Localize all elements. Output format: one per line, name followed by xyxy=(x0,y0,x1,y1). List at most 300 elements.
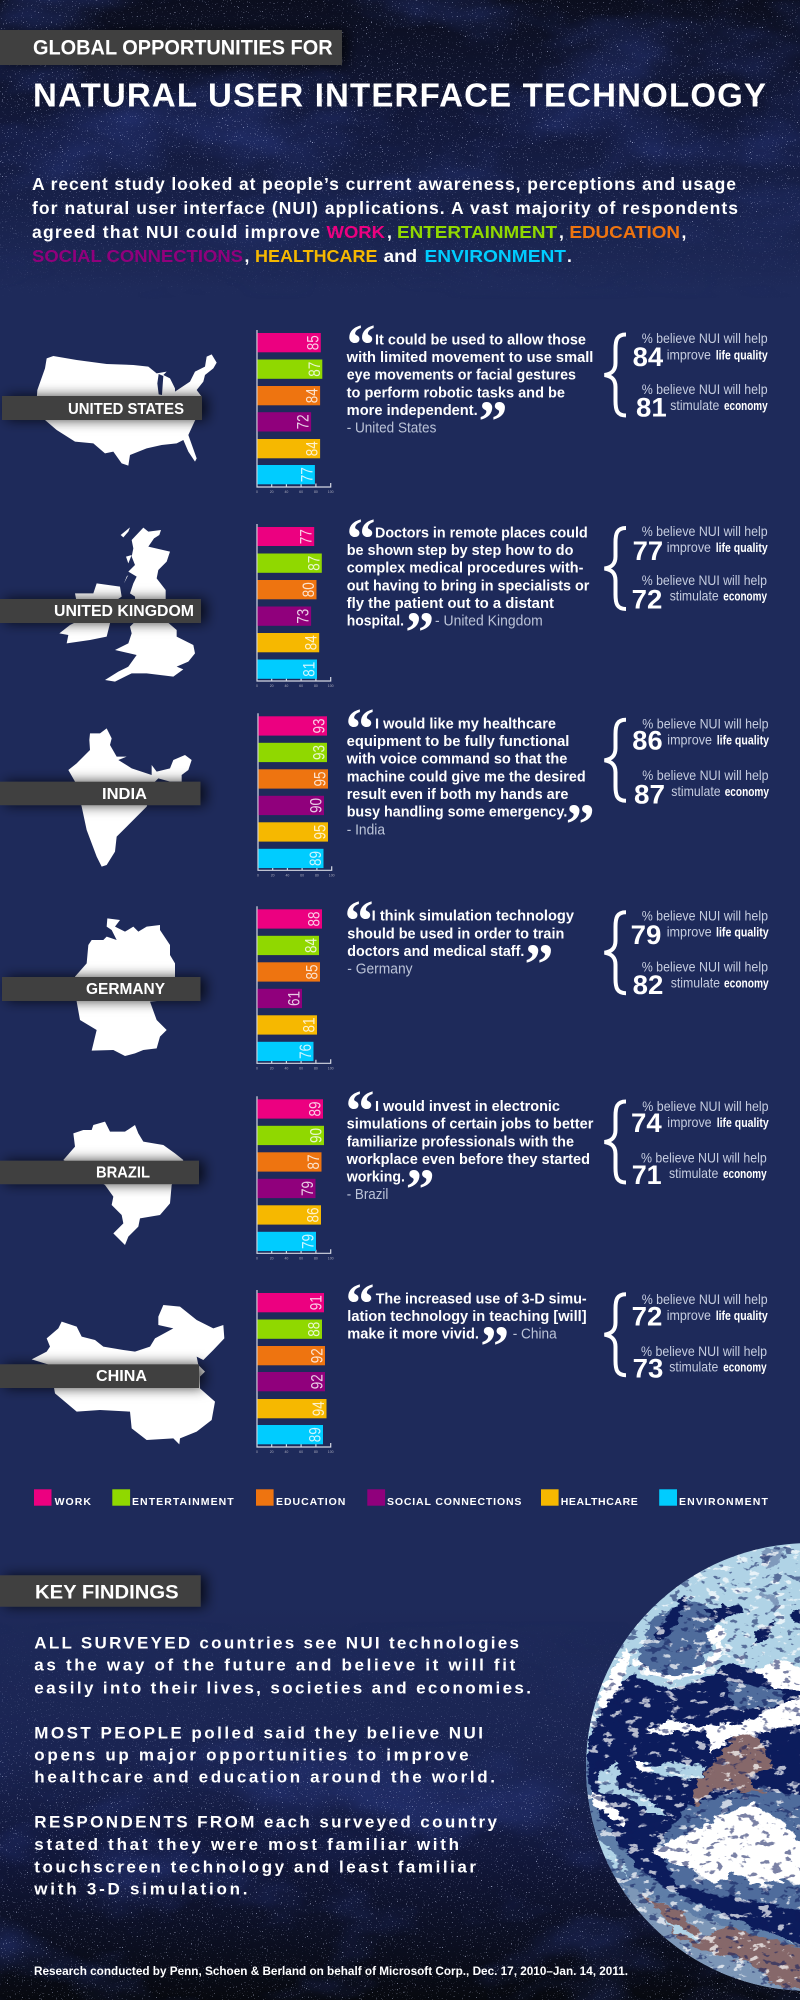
panel: China xyxy=(0,1271,768,1454)
bar: education 87 xyxy=(258,1152,323,1172)
key findings heading: KEY FINDINGS xyxy=(35,1581,179,1603)
axis labels: 60 xyxy=(299,1450,303,1454)
bar: education 92 xyxy=(258,1346,326,1365)
bar: work 88: 88 xyxy=(304,911,324,926)
axis labels: 40 xyxy=(284,1450,288,1454)
label banner: United Kingdom xyxy=(0,599,201,623)
axis labels: 0 xyxy=(256,684,258,688)
quote: United Kingdom: hospital. xyxy=(347,614,404,630)
earth globe xyxy=(586,1543,800,1991)
quote: Brazil: - Brazil xyxy=(347,1186,388,1203)
axis labels xyxy=(256,1066,334,1070)
economy stat xyxy=(632,1150,767,1190)
stats: Brazil xyxy=(604,1098,769,1190)
key findings banner xyxy=(0,1575,201,1607)
bar: work 91: 91 xyxy=(306,1295,326,1310)
quote: United States: with limited movement to use small xyxy=(346,350,593,366)
bar: entertainment 87: 87 xyxy=(304,556,323,571)
panel: Brazil xyxy=(0,1078,769,1260)
quote: India: with voice command so that the xyxy=(346,752,567,768)
quote: Brazil: ” xyxy=(406,1157,435,1222)
bar: healthcare 81 xyxy=(258,1015,318,1035)
life quality stat: improve xyxy=(667,346,711,362)
finding: most people: opens up major opportunities to improve xyxy=(34,1746,469,1765)
life quality stat: improve xyxy=(667,732,712,748)
label banner: India: INDIA xyxy=(102,786,147,803)
panel: United Kingdom xyxy=(0,506,768,688)
stats: United States xyxy=(604,330,768,423)
bar: environment 76: 76 xyxy=(296,1044,315,1059)
brace xyxy=(604,334,626,416)
bar: healthcare 84 xyxy=(258,439,322,458)
bar chart: Germany xyxy=(256,906,334,1070)
label banner: India xyxy=(0,782,200,805)
quote: China: make it more vivid. xyxy=(347,1327,479,1343)
axis labels: 100 xyxy=(328,684,334,688)
bar: social connections 61: 61 xyxy=(284,991,304,1006)
bar: education 80: 80 xyxy=(299,582,318,597)
axis labels: 40 xyxy=(285,873,289,877)
label banner: United Kingdom: UNITED KINGDOM xyxy=(54,603,194,620)
life quality stat: life quality xyxy=(716,1308,768,1323)
quote: Germany: doctors and medical staff. xyxy=(347,944,524,960)
intro paragraph: EDUCATION xyxy=(569,222,680,242)
legend: entertainment: ENTERTAINMENT xyxy=(132,1496,234,1508)
map: United States xyxy=(37,354,217,466)
bar: social connections 79 xyxy=(258,1179,317,1198)
quote: Brazil: working. xyxy=(346,1170,405,1186)
economy stat: economy xyxy=(724,976,769,991)
label banner: Germany xyxy=(2,977,200,1001)
intro paragraph: ENTERTAINMENT xyxy=(397,222,557,242)
axis labels xyxy=(256,684,334,688)
legend: work: WORK xyxy=(55,1496,91,1508)
bar: environment 89 xyxy=(258,1425,324,1444)
economy stat xyxy=(633,1343,767,1384)
bar: education 95 xyxy=(258,769,330,789)
quote: Brazil: workplace even before they started xyxy=(346,1152,590,1168)
axis labels: 0 xyxy=(256,1450,258,1454)
axis labels: 100 xyxy=(328,490,334,494)
economy stat: % believe NUI will help xyxy=(641,1343,767,1359)
life quality stat: improve xyxy=(667,924,712,940)
quote: Germany: I think simulation technology xyxy=(372,909,574,925)
bar: social connections 79: 79 xyxy=(298,1181,317,1196)
quote: United States xyxy=(346,312,593,454)
life quality stat: % believe NUI will help xyxy=(642,1291,768,1307)
axis labels xyxy=(256,1256,334,1260)
economy stat: economy xyxy=(724,398,768,413)
bar: entertainment 90 xyxy=(258,1126,326,1145)
title banner xyxy=(0,30,342,65)
quote: United Kingdom: Doctors in remote places could xyxy=(375,525,588,541)
quote: Brazil: “ xyxy=(346,1078,374,1143)
bar: entertainment 87 xyxy=(258,554,323,573)
map: India xyxy=(68,728,192,867)
bar: entertainment 88 xyxy=(258,1320,324,1339)
quote: China: The increased use of 3-D simu- xyxy=(376,1291,587,1307)
bar: social connections 72 xyxy=(258,412,313,432)
bar: environment 89: 89 xyxy=(306,1427,324,1442)
legend: education: EDUCATION xyxy=(276,1496,345,1508)
main title: NATURAL USER INTERFACE TECHNOLOGY xyxy=(33,77,766,114)
bar: environment 89 xyxy=(258,849,325,868)
quote: United States: It could be used to allow those xyxy=(375,332,586,348)
quote: United States: to perform robotic tasks and be xyxy=(347,385,565,401)
bar: work 93 xyxy=(258,716,328,736)
bar: education 95: 95 xyxy=(310,771,330,786)
label banner: China: CHINA xyxy=(96,1368,147,1385)
economy stat: % believe NUI will help xyxy=(641,1150,767,1166)
life quality stat: 77 xyxy=(633,536,663,566)
intro paragraph: for natural user interface (NUI) applications. A vast majority of respondents xyxy=(32,198,738,218)
bar: environment 81: 81 xyxy=(300,662,318,677)
life quality stat: life quality xyxy=(716,347,768,362)
quote: Brazil: I would invest in electronic xyxy=(375,1099,560,1115)
quote: United States: “ xyxy=(346,312,376,377)
finding: all surveyed: ALL SURVEYED countries see NUI technologies xyxy=(34,1633,519,1652)
map: Brazil xyxy=(63,1122,183,1245)
bar: social connections 61 xyxy=(258,989,304,1008)
quote: United States: eye movements or facial gestures xyxy=(347,368,576,384)
key findings section xyxy=(0,1575,531,1898)
economy stat: economy xyxy=(725,784,770,799)
bar: environment 76 xyxy=(258,1042,315,1061)
bar: education 80 xyxy=(258,580,318,599)
bar: education 85 xyxy=(258,962,322,982)
finding: respondents: with 3-D simulation. xyxy=(33,1879,248,1898)
life quality stat: life quality xyxy=(717,1115,769,1130)
axis labels xyxy=(256,490,334,494)
life quality stat: improve xyxy=(667,1114,712,1130)
bar: social connections 73: 73 xyxy=(294,609,313,624)
axis labels: 20 xyxy=(271,873,275,877)
axis labels: 0 xyxy=(256,490,258,494)
life quality stat: 74 xyxy=(631,1108,662,1138)
bar: healthcare 94 xyxy=(258,1399,328,1418)
quote: India xyxy=(346,696,595,857)
quote: United States: - United States xyxy=(347,420,436,437)
bar chart: China xyxy=(256,1290,334,1454)
legend: social connections xyxy=(367,1489,521,1508)
axis labels: 60 xyxy=(299,1256,303,1260)
bar: education 92: 92 xyxy=(308,1348,326,1363)
legend: healthcare: HEALTHCARE xyxy=(561,1496,638,1508)
bar: work 77 xyxy=(258,527,316,546)
intro paragraph xyxy=(32,174,738,266)
economy stat: 72 xyxy=(632,584,662,614)
map: China xyxy=(32,1305,224,1444)
economy stat: economy xyxy=(723,1166,767,1181)
label banner: China xyxy=(0,1364,199,1388)
life quality stat: life quality xyxy=(717,733,770,748)
life quality stat: 72 xyxy=(632,1302,662,1332)
axis labels: 100 xyxy=(329,873,335,877)
intro paragraph: , xyxy=(387,222,392,242)
axis xyxy=(257,524,331,681)
intro paragraph: , xyxy=(682,222,686,242)
axis labels: 40 xyxy=(284,1066,288,1070)
finding: all surveyed xyxy=(34,1633,531,1697)
intro paragraph: , xyxy=(244,246,249,266)
economy stat: 82 xyxy=(633,970,663,1000)
axis xyxy=(257,1290,331,1447)
axis labels: 40 xyxy=(284,1256,288,1260)
bar: entertainment 93 xyxy=(258,743,328,762)
axis labels: 0 xyxy=(256,1256,258,1260)
bar: entertainment 87 xyxy=(258,360,324,379)
stats: Germany xyxy=(604,908,769,1000)
legend: social connections: SOCIAL CONNECTIONS xyxy=(387,1496,521,1508)
economy stat: % believe NUI will help xyxy=(642,572,767,588)
intro paragraph: WORK xyxy=(326,222,385,242)
axis labels: 20 xyxy=(270,1066,274,1070)
axis xyxy=(257,330,331,487)
quote: China xyxy=(346,1271,587,1379)
legend: work xyxy=(34,1489,91,1508)
quote: United States: ” xyxy=(478,389,508,454)
label banner: United States xyxy=(2,396,202,420)
bar: work 77: 77 xyxy=(297,529,316,544)
panel: India xyxy=(0,696,770,877)
quote: China: “ xyxy=(346,1271,374,1336)
axis labels: 80 xyxy=(314,684,318,688)
quote: United Kingdom: “ xyxy=(346,506,376,571)
bar: social connections 90: 90 xyxy=(306,798,326,813)
legend xyxy=(34,1489,768,1508)
life quality stat: % believe NUI will help xyxy=(642,330,768,346)
quote: United Kingdom: out having to bring in specialists or xyxy=(347,578,590,594)
quote: China: ” xyxy=(480,1314,509,1379)
quote: United Kingdom: fly the patient out to a distant xyxy=(347,596,554,612)
bar: work 89 xyxy=(258,1099,324,1119)
axis labels: 0 xyxy=(256,1066,258,1070)
legend: education xyxy=(256,1489,345,1508)
life quality stat: % believe NUI will help xyxy=(642,716,769,732)
axis labels: 40 xyxy=(284,490,288,494)
label banner: United States: UNITED STATES xyxy=(68,401,184,418)
label banner: Germany: GERMANY xyxy=(86,981,165,998)
bar: work 89: 89 xyxy=(306,1102,324,1117)
axis labels: 80 xyxy=(314,1066,318,1070)
quote: United States: more independent. xyxy=(347,403,478,419)
bar: healthcare 84: 84 xyxy=(303,441,322,456)
bar: healthcare 81: 81 xyxy=(300,1017,318,1032)
quote: China: - China xyxy=(513,1326,557,1343)
axis labels: 100 xyxy=(328,1450,334,1454)
life quality stat: 84 xyxy=(633,342,663,372)
bar: work 85: 85 xyxy=(303,335,322,350)
quote: United Kingdom: ” xyxy=(405,600,434,665)
economy stat: stimulate xyxy=(671,975,720,991)
quote: India: busy handling some emergency. xyxy=(347,805,567,821)
quote: India: I would like my healthcare xyxy=(375,716,556,732)
quote: India: equipment to be fully functional xyxy=(347,734,569,750)
bar chart: India xyxy=(257,713,335,877)
bar chart: United Kingdom xyxy=(256,524,334,688)
economy stat: % believe NUI will help xyxy=(642,767,769,783)
quote: Brazil xyxy=(346,1078,594,1222)
map: Germany xyxy=(75,918,175,1056)
brace xyxy=(604,912,626,993)
bar: healthcare 84 xyxy=(258,633,321,652)
bar: healthcare 95 xyxy=(258,822,330,842)
economy stat xyxy=(633,959,769,1000)
bar chart: United States xyxy=(256,330,334,494)
life quality stat: % believe NUI will help xyxy=(642,1098,769,1114)
quote: United Kingdom xyxy=(346,506,590,665)
bar: healthcare 86: 86 xyxy=(304,1208,322,1223)
bar: work 91 xyxy=(258,1293,326,1312)
axis labels: 100 xyxy=(328,1066,334,1070)
economy stat: stimulate xyxy=(670,397,719,413)
life quality stat xyxy=(633,523,768,566)
bar: education 84 xyxy=(258,386,322,405)
economy stat xyxy=(636,381,768,423)
axis labels: 80 xyxy=(314,490,318,494)
axis labels: 100 xyxy=(328,1256,334,1260)
life quality stat xyxy=(631,1098,769,1138)
quote: Brazil: simulations of certain jobs to better xyxy=(347,1117,594,1133)
bar: social connections 92: 92 xyxy=(308,1374,326,1389)
economy stat: economy xyxy=(723,589,768,604)
stats: China xyxy=(604,1291,768,1384)
brace xyxy=(604,528,626,609)
quote: Germany: ” xyxy=(524,932,554,997)
brace xyxy=(604,1294,626,1375)
axis labels: 0 xyxy=(257,873,259,877)
economy stat xyxy=(634,767,770,809)
map: United Kingdom and Ireland xyxy=(59,527,195,682)
quote: United Kingdom: be shown step by step how to do xyxy=(347,543,574,559)
bar: entertainment 90: 90 xyxy=(306,1128,326,1143)
life quality stat: life quality xyxy=(716,540,768,555)
brace xyxy=(604,720,626,801)
finding: most people: healthcare and education around the world. xyxy=(34,1768,495,1787)
bar: education 85: 85 xyxy=(302,964,322,979)
economy stat: stimulate xyxy=(670,588,719,604)
quote: Germany: should be used in order to train xyxy=(347,926,564,942)
quote: Germany: - Germany xyxy=(347,961,413,978)
axis labels: 20 xyxy=(270,490,274,494)
intro paragraph: ENVIRONMENT xyxy=(424,246,566,266)
life quality stat: % believe NUI will help xyxy=(642,908,768,924)
quote: India: - India xyxy=(347,822,386,839)
life quality stat: 79 xyxy=(631,920,661,950)
kicker heading: GLOBAL OPPORTUNITIES FOR xyxy=(33,36,333,59)
life quality stat: life quality xyxy=(716,925,769,940)
stats: United Kingdom xyxy=(604,523,768,614)
axis labels: 60 xyxy=(299,1066,303,1070)
bar: work 85 xyxy=(258,333,322,352)
axis labels: 60 xyxy=(299,684,303,688)
bar: entertainment 84 xyxy=(258,936,320,955)
economy stat: % believe NUI will help xyxy=(642,959,768,975)
life quality stat: improve xyxy=(667,539,711,555)
quote: India: ” xyxy=(566,792,595,857)
axis labels xyxy=(257,873,335,877)
axis labels: 20 xyxy=(270,1450,274,1454)
economy stat: stimulate xyxy=(671,783,721,799)
economy stat: stimulate xyxy=(669,1165,718,1181)
economy stat: 87 xyxy=(634,779,665,809)
axis labels: 60 xyxy=(300,873,304,877)
brace xyxy=(604,1102,626,1182)
quote: Germany: “ xyxy=(344,888,374,953)
footer source note: Research conducted by Penn, Schoen & Berland on behalf of Microsoft Corp., Dec. 17, 2010–Jan. 14, 2011. xyxy=(34,1964,628,1978)
intro paragraph: . xyxy=(567,246,572,266)
bar: social connections 72: 72 xyxy=(294,414,313,429)
life quality stat xyxy=(631,908,769,950)
quote: Germany xyxy=(344,888,574,997)
life quality stat: % believe NUI will help xyxy=(642,523,768,539)
axis xyxy=(258,713,332,870)
intro paragraph: agreed that NUI could improve xyxy=(32,222,320,242)
axis labels xyxy=(256,1450,334,1454)
legend: healthcare xyxy=(541,1489,638,1508)
panel: United States xyxy=(2,312,768,494)
economy stat: economy xyxy=(723,1360,767,1375)
quote: India: result even if both my hands are xyxy=(347,787,568,803)
quote: China: lation technology in teaching [will] xyxy=(347,1309,587,1325)
quote: United Kingdom: - United Kingdom xyxy=(435,613,543,630)
quote: Brazil: familiarize professionals with the xyxy=(347,1134,574,1150)
quote: India: machine could give me the desired xyxy=(347,769,586,785)
bar: social connections 73 xyxy=(258,606,313,626)
title block xyxy=(0,30,766,114)
finding: all surveyed: easily into their lives, societies and economies. xyxy=(34,1678,531,1697)
bar: entertainment 88: 88 xyxy=(304,1322,324,1337)
intro paragraph: A recent study looked at people’s current awareness, perceptions and usage xyxy=(32,174,736,194)
legend: entertainment xyxy=(112,1489,234,1508)
label banner: Brazil: BRAZIL xyxy=(96,1164,150,1182)
bar: healthcare 84: 84 xyxy=(302,635,321,650)
finding: respondents: touchscreen technology and least familiar xyxy=(34,1857,476,1876)
bar: education 84: 84 xyxy=(303,388,322,403)
life quality stat: improve xyxy=(667,1307,711,1323)
axis xyxy=(257,1096,331,1253)
economy stat: 71 xyxy=(632,1160,662,1190)
economy stat: 81 xyxy=(636,393,667,423)
quote: India: “ xyxy=(346,696,374,761)
bar: environment 77: 77 xyxy=(297,467,316,482)
bar: healthcare 86 xyxy=(258,1205,322,1225)
bar: entertainment 84: 84 xyxy=(302,938,320,953)
bar: environment 81 xyxy=(258,660,318,679)
label banner: Brazil xyxy=(0,1161,199,1184)
economy stat: stimulate xyxy=(669,1359,718,1375)
axis labels: 20 xyxy=(270,684,274,688)
life quality stat xyxy=(632,1291,768,1332)
bar: entertainment 93: 93 xyxy=(310,745,328,760)
intro paragraph: HEALTHCARE xyxy=(255,246,378,266)
axis labels: 80 xyxy=(314,1256,318,1260)
intro paragraph: SOCIAL CONNECTIONS xyxy=(32,246,243,266)
intro paragraph: , xyxy=(559,222,564,242)
bar: entertainment 87: 87 xyxy=(305,362,324,377)
axis labels: 20 xyxy=(270,1256,274,1260)
finding: respondents: RESPONDENTS FROM each surveyed country xyxy=(34,1812,498,1831)
bar: environment 79: 79 xyxy=(298,1234,318,1249)
axis labels: 60 xyxy=(299,490,303,494)
economy stat: 73 xyxy=(633,1354,663,1384)
legend: environment: ENVIRONMENT xyxy=(679,1496,768,1508)
axis labels: 80 xyxy=(315,873,319,877)
bar: social connections 92 xyxy=(258,1372,326,1391)
panel: Germany xyxy=(2,888,769,1070)
life quality stat xyxy=(633,330,768,372)
legend: environment xyxy=(659,1489,768,1508)
